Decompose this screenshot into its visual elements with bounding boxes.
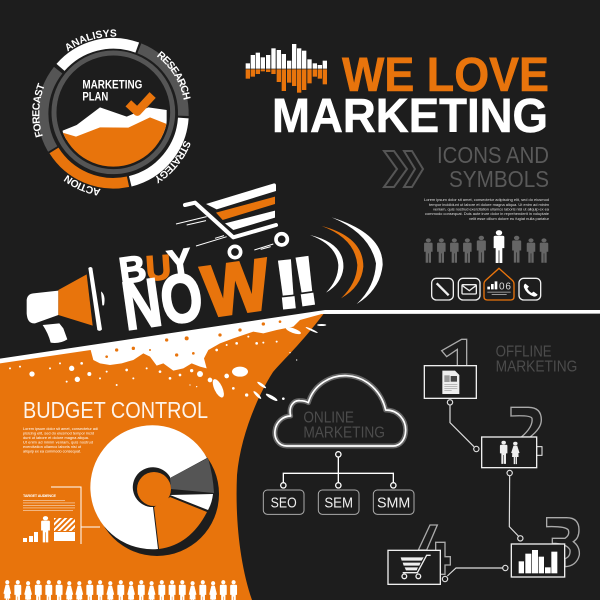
offline label: OFFLINE [496,344,552,361]
headline: buy now: ! [289,244,322,320]
bottom people row [3,580,237,600]
wheel chart [62,107,167,167]
plan title: PLAN [82,89,108,103]
subtitle: icons and symbols: SYMBOLS [449,166,549,192]
intro paragraph: commodo consequat. Duis aute irure dolor in reprehenderit in voluptate [425,211,550,216]
headline: buy now: W [198,244,275,333]
segment: action [54,150,128,183]
wheel labels: RESEARCH [157,51,191,100]
plan title: MARKETING [82,77,142,91]
target heading: TARGET AUDIENCE [23,494,56,498]
headline: buy now: NO [118,258,207,345]
hatched box [54,518,75,531]
icon: megaphone [27,267,105,343]
budget paragraph [23,427,98,454]
icon: phone [519,278,541,300]
intro paragraph: Lorem ipsum dolor sit amet, consectetur adipiscing elit, sed do eiusmod [424,197,549,202]
title: we love: WE LOVE [342,49,549,102]
orange slice [154,497,207,549]
white band and paint splatter [0,310,600,402]
check mark [128,95,153,112]
online marketing label [303,409,385,441]
segment: strategy [130,118,183,181]
headline: buy now: U [145,248,172,289]
headline: buy now: B [116,247,149,292]
cloud icon [275,376,406,446]
icon: chevrons [384,151,423,187]
box: sem [318,490,359,514]
wheel labels: FORECAST [32,82,44,138]
box: seo [263,490,304,514]
connectors [442,400,523,582]
offline label: MARKETING [496,359,577,376]
box: smm: SMM [377,495,410,511]
online marketing label: MARKETING [303,424,385,441]
person [41,516,50,542]
offline label [496,344,577,376]
orange panel [0,312,325,600]
pie chart [90,425,219,556]
box: smm [373,490,414,514]
wheel labels: ANALISYS [66,29,116,52]
headline: buy now: ! [272,247,302,323]
gray slice [170,458,214,493]
box: seo: SEO [271,495,297,511]
main white slice [90,425,207,549]
headline: buy now: Y [165,240,194,284]
online marketing label: ONLINE [303,409,354,426]
wheel labels [32,29,191,196]
icon: stats badge: 06 [499,282,511,293]
target audience block [23,487,100,544]
people row [424,230,548,263]
budget paragraph: Ut enim ad minim veniam, quis nostrud [23,440,93,444]
segment: research [139,48,183,116]
segment: forecast [43,70,58,149]
icon: mail [458,278,480,300]
heading: budget control: BUDGET CONTROL [23,397,208,423]
icon: shopping cart [176,183,287,258]
inner ring [54,53,173,172]
budget paragraph: exercitation ullamco laboris nisi ut [23,445,82,449]
box: sem: SEM [324,495,353,511]
sound arcs [310,217,383,304]
icon: pencil [432,278,453,300]
subtitle: icons and symbols [437,142,549,192]
budget paragraph: Lorem ipsum dolor sit amet, consectetur adi [23,427,98,431]
pie shadow [95,432,219,556]
intro paragraph [424,197,550,221]
segment: analisys [60,43,137,67]
step 2: people [482,407,542,468]
plan title [82,77,142,103]
step 4: cart [388,525,450,584]
icon: sound wave [246,44,327,93]
mini bars [23,532,38,542]
pie hole [133,467,170,507]
small white slice [170,494,213,510]
step 1: document [424,339,476,398]
icon row [432,268,541,300]
budget paragraph: dunt ut labore et dolore magna aliqua. [23,436,89,440]
intro paragraph: tempor incididunt ut labore et dolore magna aliqua. Ut enim ad minim [429,202,550,207]
intro paragraph: veniam, quis nostrud exercitation ullamco laboris nisi ut aliquip ex ea [433,206,550,212]
online marketing diagram [263,376,414,514]
headline: buy now [116,240,322,345]
title: marketing: MARKETING [272,90,548,143]
connector tree [281,452,396,488]
intro paragraph: velit esse cillum dolore eu fugiat nulla pariatur [469,216,550,221]
wheel labels: ACTION [64,175,101,196]
step 3: bar chart [511,518,579,577]
offline marketing diagram [388,339,579,584]
subtitle: icons and symbols: ICONS AND [437,142,549,168]
marketing plan wheel [32,29,191,196]
wheel labels: STRATEGY [156,141,190,184]
target text [23,500,75,511]
budget paragraph: aliquip ex ea commodo consequat. [23,450,81,454]
buy now group [27,183,383,345]
budget paragraph: pisicing elit, sed do eiusmod tempor incid [23,432,94,436]
bracket line [51,487,100,544]
